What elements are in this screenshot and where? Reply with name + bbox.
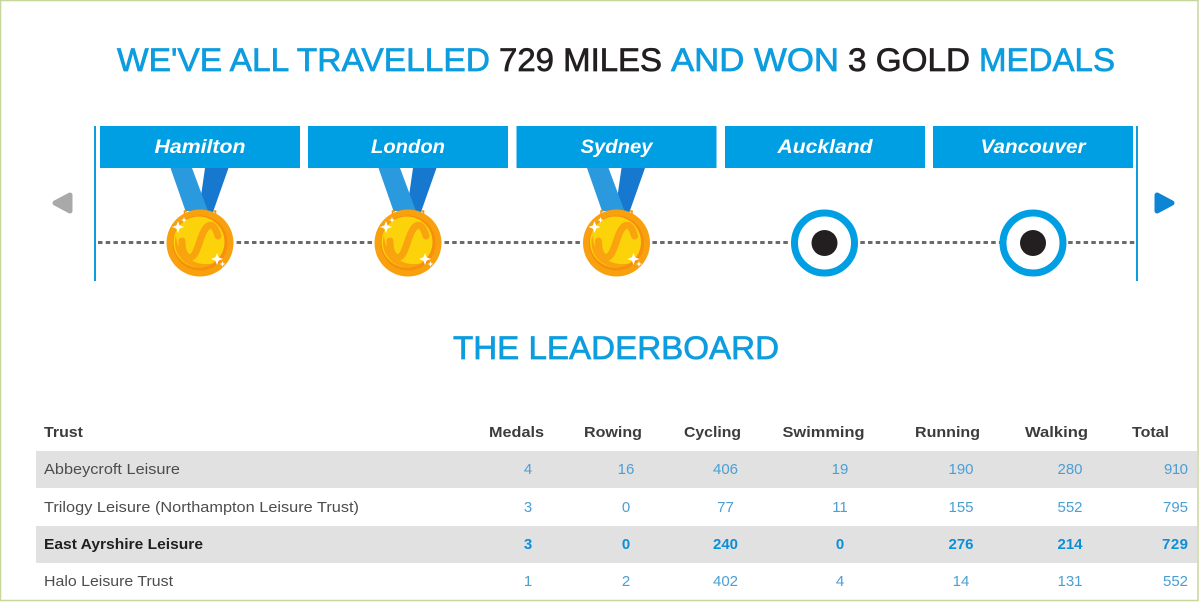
timeline: [55, 126, 1172, 281]
row: Trilogy Leisure: 155: [948, 499, 974, 516]
icon: target Vancouver: [1003, 213, 1063, 273]
row: Abbeycroft Leisure: 19: [832, 461, 848, 478]
banner: Vancouver: [933, 126, 1133, 168]
row: East Ayrshire Leisure: 0: [836, 536, 844, 553]
table header: Total: [1132, 424, 1169, 441]
row: Trilogy Leisure: 795: [1163, 499, 1188, 516]
row: Abbeycroft Leisure: Abbeycroft Leisure: [44, 461, 180, 478]
table header: Swimming: [782, 424, 864, 441]
icon: target Auckland: [794, 213, 854, 273]
row: Halo Leisure Trust: Halo Leisure Trust: [44, 573, 174, 590]
row: Trilogy Leisure: 77: [717, 499, 734, 516]
icon: gold medal Sydney: [583, 168, 650, 276]
row: East Ayrshire Leisure: 0: [622, 536, 630, 553]
title: MEDALS: [979, 42, 1115, 78]
row: Halo Leisure Trust: 402: [713, 573, 738, 590]
banner: Sydney: [516, 126, 716, 168]
row: Halo Leisure Trust: [44, 573, 1188, 590]
banner: Auckland: Auckland: [776, 137, 873, 158]
leaderboard table: [36, 424, 1197, 590]
row: Halo Leisure Trust: 131: [1057, 573, 1083, 590]
table header: [44, 424, 1169, 441]
table header: Medals: [489, 424, 544, 441]
table header: Rowing: [584, 424, 642, 441]
title: 3 GOLD: [848, 42, 970, 78]
row: Abbeycroft Leisure: 910: [1164, 461, 1188, 478]
row: Abbeycroft Leisure: 4: [524, 461, 532, 478]
row: East Ayrshire Leisure: East Ayrshire Leisure: [44, 536, 203, 553]
row: Abbeycroft Leisure: [36, 451, 1197, 488]
title: WE'VE ALL TRAVELLED: [117, 42, 490, 78]
row: Abbeycroft Leisure: 16: [618, 461, 634, 478]
banner: London: London: [371, 137, 445, 158]
icon: gold medal London: [374, 168, 442, 276]
banner: Sydney: Sydney: [580, 137, 654, 158]
row: Trilogy Leisure: 3: [524, 499, 532, 516]
banner: London: [308, 126, 508, 168]
icon: gold medal Hamilton: [166, 168, 234, 276]
table header: Walking: [1025, 424, 1088, 441]
row: Trilogy Leisure: Trilogy Leisure (Northampton Leisure Trust): [44, 499, 359, 516]
heading: the leaderboard: THE LEADERBOARD: [453, 330, 779, 366]
table header: Trust: [44, 424, 83, 441]
row: Trilogy Leisure: 552: [1057, 499, 1083, 516]
arrow: next: [1157, 195, 1172, 211]
row: Trilogy Leisure: [44, 499, 1188, 516]
row: East Ayrshire Leisure: 276: [948, 536, 974, 553]
row: Halo Leisure Trust: 1: [524, 573, 532, 590]
row: East Ayrshire Leisure: 729: [1162, 536, 1188, 553]
row: East Ayrshire Leisure: 3: [524, 536, 532, 553]
title: 729 MILES: [499, 42, 662, 78]
row: Abbeycroft Leisure: 280: [1057, 461, 1083, 478]
table header: Cycling: [684, 424, 741, 441]
row: East Ayrshire Leisure: [36, 526, 1197, 563]
row: Halo Leisure Trust: 2: [622, 573, 630, 590]
row: Trilogy Leisure: 0: [622, 499, 630, 516]
row: Halo Leisure Trust: 4: [836, 573, 844, 590]
banner: Vancouver: Vancouver: [980, 137, 1087, 158]
row: Halo Leisure Trust: 552: [1163, 573, 1188, 590]
row: Halo Leisure Trust: 14: [953, 573, 969, 590]
title: [117, 42, 1115, 78]
title: AND WON: [671, 42, 839, 78]
banner: Auckland: [725, 126, 925, 168]
row: East Ayrshire Leisure: 240: [713, 536, 738, 553]
row: Trilogy Leisure: 11: [832, 499, 848, 516]
banner: Hamilton: Hamilton: [154, 137, 246, 158]
row: East Ayrshire Leisure: 214: [1057, 536, 1083, 553]
row: Abbeycroft Leisure: 406: [713, 461, 738, 478]
table header: Running: [915, 424, 980, 441]
arrow: previous: [55, 195, 70, 211]
row: Abbeycroft Leisure: 190: [948, 461, 974, 478]
banner: Hamilton: [100, 126, 300, 168]
